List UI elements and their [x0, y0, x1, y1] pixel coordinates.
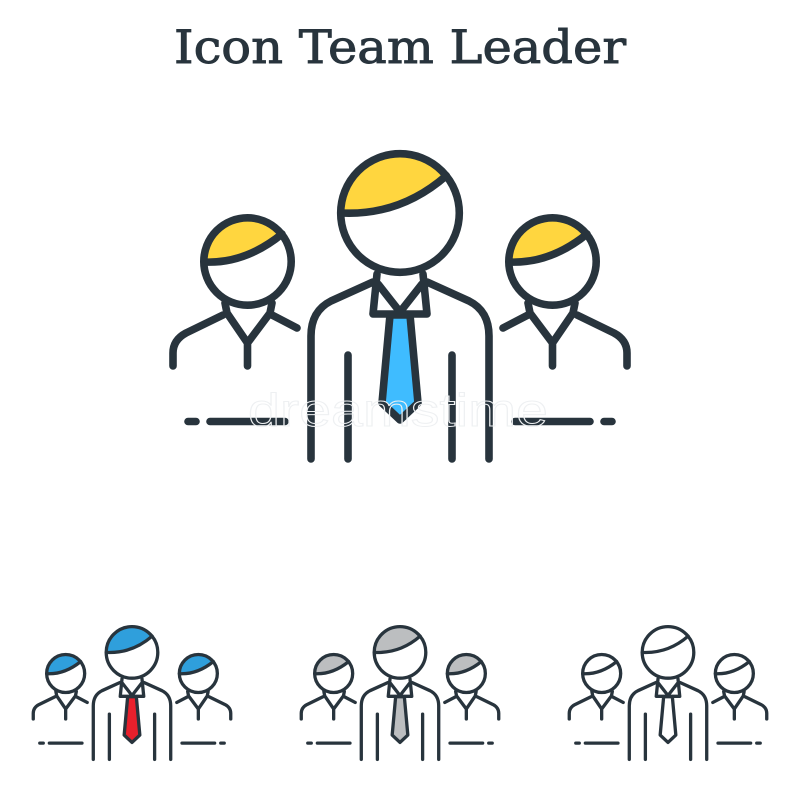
main icon: team leader with yellow hair and blue tie: [173, 153, 627, 459]
small icon: outline only: [569, 627, 767, 759]
small icon: blue hair and red tie: [33, 627, 231, 759]
title: Icon Team Leader: [174, 20, 626, 74]
watermark: dreamstime: [248, 384, 548, 436]
small icon: grey fill: [301, 627, 499, 759]
